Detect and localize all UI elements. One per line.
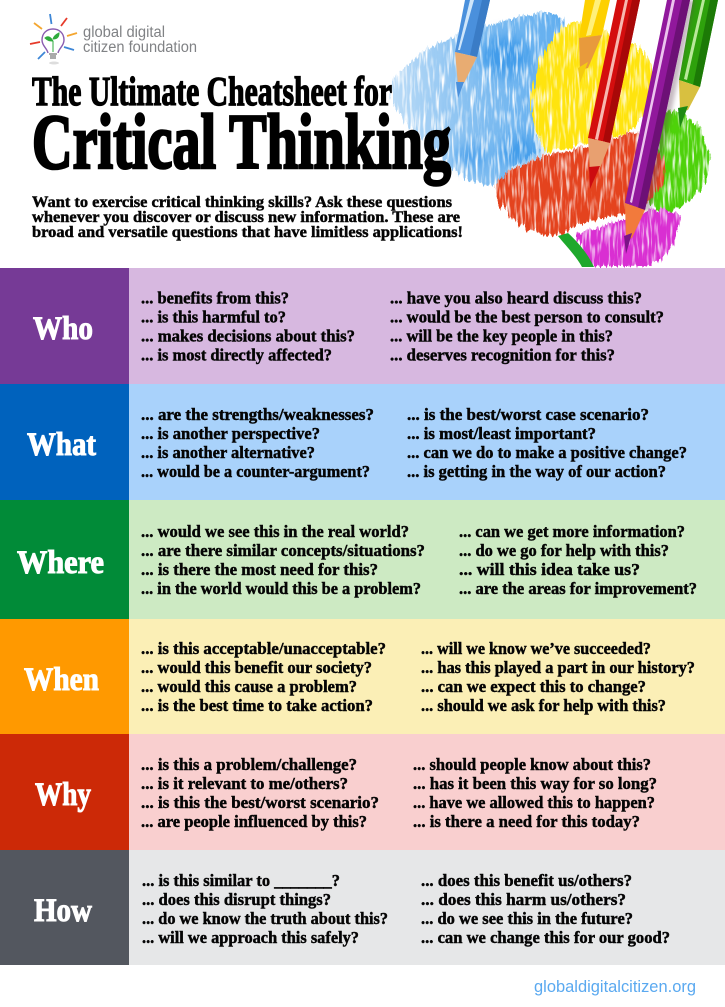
logo text: global digital — [83, 24, 165, 41]
pencil: yellow — [578, 0, 610, 83]
brain lobe: magenta — [576, 209, 680, 266]
questions: when: ... would this benefit our society? — [141, 658, 372, 677]
questions: who — [141, 288, 664, 364]
questions: what: ... is another alternative? — [141, 443, 315, 462]
brain lobe: red — [494, 132, 664, 235]
questions: where: ... can we get more information? — [459, 522, 685, 541]
questions: what: ... is the best/worst case scenario? — [407, 405, 649, 424]
questions: who: ... is most directly affected? — [141, 346, 332, 364]
questions: where: ... are there similar concepts/situations? — [141, 541, 425, 560]
logo: global digital citizen foundation — [30, 14, 197, 64]
questions: who: ... is this harmful to? — [141, 308, 286, 326]
questions: who: ... will be the key people in this? — [390, 326, 613, 346]
questions: where: ... do we go for help with this? — [459, 541, 669, 560]
questions: who: ... deserves recognition for this? — [390, 346, 615, 364]
panel: why — [0, 734, 725, 850]
brain lobe: blue — [391, 12, 564, 186]
pencil: purple — [624, 0, 695, 254]
questions: when: ... will we know we’ve succeeded? — [421, 639, 651, 658]
heading: who: Who — [33, 311, 93, 347]
heading: why: Why — [35, 777, 91, 813]
intro text: broad and versatile questions that have limitless applications! — [32, 224, 463, 241]
brain lobe: yellow — [531, 22, 655, 152]
questions: what — [141, 405, 687, 481]
heading: how: How — [34, 893, 92, 929]
pencil: blue — [455, 0, 490, 98]
questions: what: ... are the strengths/weaknesses? — [141, 405, 374, 424]
logo text: citizen foundation — [83, 39, 197, 56]
icon: light bulb with rays — [30, 14, 77, 64]
brain stem: green — [558, 233, 594, 267]
title line 2: Critical Thinking — [32, 98, 451, 185]
questions: when: ... can we expect this to change? — [421, 677, 646, 696]
questions: how: ... can we change this for our good? — [421, 928, 670, 947]
questions: where: ... are the areas for improvement? — [459, 579, 697, 598]
panel: who — [0, 268, 725, 384]
questions: when: ... should we ask for help with this? — [421, 696, 666, 715]
intro text: Want to exercise critical thinking skills? Ask these questions — [32, 194, 452, 211]
pencil: red — [588, 0, 640, 189]
questions: why: ... should people know about this? — [413, 755, 651, 774]
questions: where — [141, 522, 697, 598]
questions: when: ... is this acceptable/unacceptable? — [141, 639, 386, 658]
questions: what: ... would be a counter-argument? — [141, 462, 370, 481]
intro text — [32, 194, 463, 241]
panel: when — [0, 619, 725, 734]
questions: who: ... have you also heard discuss this? — [390, 288, 642, 308]
footer url: globaldigitalcitizen.org — [534, 977, 696, 996]
questions: how: ... will we approach this safely? — [142, 928, 359, 947]
questions: why: ... is this a problem/challenge? — [141, 755, 357, 774]
questions: why: ... is it relevant to me/others? — [141, 774, 348, 793]
questions: how: ... do we know the truth about this? — [142, 909, 388, 928]
questions: when: ... would this cause a problem? — [141, 677, 357, 696]
questions: what: ... is getting in the way of our action? — [407, 462, 666, 481]
title line 1: The Ultimate Cheatsheet for — [32, 68, 392, 114]
questions: where: ... is there the most need for this? — [141, 560, 378, 579]
questions: who: ... would be the best person to consult? — [390, 308, 664, 326]
questions: where: ... in the world would this be a problem? — [141, 579, 421, 598]
questions: how: ... is this similar to _______? — [142, 871, 340, 890]
heading: what: What — [27, 427, 96, 463]
questions: how: ... does this benefit us/others? — [421, 871, 632, 890]
questions: why: ... has it been this way for so long? — [413, 774, 657, 793]
questions: how: ... do we see this in the future? — [421, 909, 633, 928]
panel: how — [0, 850, 725, 965]
questions: what: ... is another perspective? — [141, 424, 320, 443]
questions: what: ... is most/least important? — [407, 424, 596, 443]
questions: where: ... would we see this in the real world? — [141, 522, 409, 541]
pencil: green — [678, 0, 718, 128]
questions: how: ... does this disrupt things? — [142, 890, 331, 909]
heading: when: When — [24, 662, 99, 698]
panel: what — [0, 384, 725, 500]
questions: when — [141, 639, 695, 715]
intro text: whenever you discover or discuss new information. These are — [32, 209, 460, 226]
heading: where: Where — [17, 545, 104, 581]
questions: how: ... does this harm us/others? — [421, 890, 626, 909]
illustration: coloured pencil brain — [391, 0, 718, 267]
questions: why: ... are people influenced by this? — [141, 812, 367, 831]
questions: why: ... is this the best/worst scenario? — [141, 793, 379, 812]
questions: why: ... have we allowed this to happen? — [413, 793, 655, 812]
questions: when: ... is the best time to take action? — [141, 696, 373, 715]
questions: how — [142, 871, 670, 947]
questions: when: ... has this played a part in our history? — [421, 658, 695, 677]
questions: why: ... is there a need for this today? — [413, 812, 640, 831]
brain lobe: green — [647, 110, 710, 210]
questions: why — [141, 755, 657, 831]
questions: who: ... benefits from this? — [141, 288, 289, 308]
questions: where: ... will this idea take us? — [459, 560, 640, 579]
questions: what: ... can we do to make a positive change? — [407, 443, 687, 462]
panel: where — [0, 500, 725, 619]
questions: who: ... makes decisions about this? — [141, 326, 355, 346]
logo text — [83, 24, 197, 56]
